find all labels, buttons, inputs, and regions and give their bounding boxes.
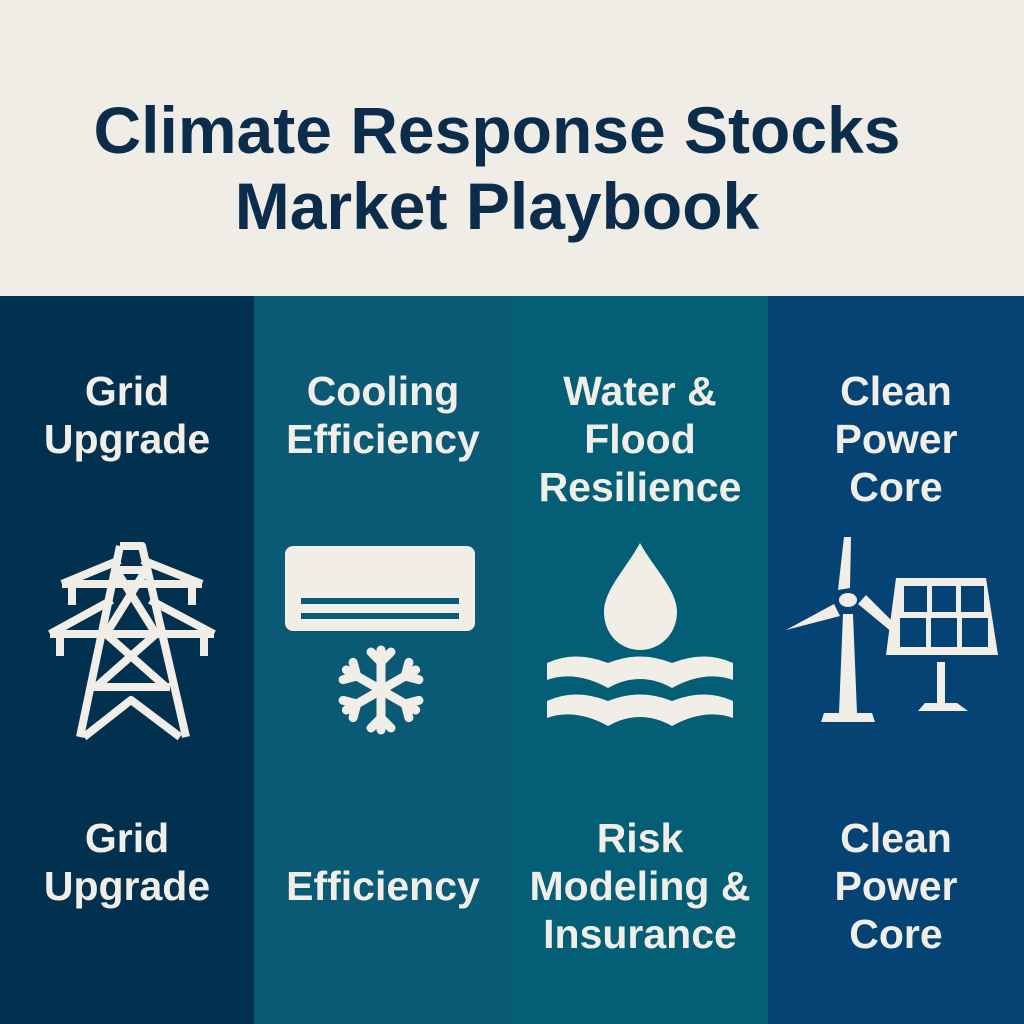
icon: wind turbine: [786, 537, 904, 722]
label: clean power top: Clean: [840, 368, 952, 414]
label: water flood top: Water &: [563, 368, 717, 414]
label: grid upgrade bottom: Grid: [85, 815, 169, 861]
icon: transmission tower: [50, 546, 214, 737]
label: efficiency bottom: Efficiency: [286, 863, 480, 909]
title: Market Playbook: [235, 169, 759, 243]
label: water flood top: Resilience: [539, 464, 741, 510]
label: grid upgrade top: Grid: [85, 368, 169, 414]
label: risk modeling bottom: Modeling &: [530, 863, 750, 909]
label: grid upgrade bottom: [44, 815, 210, 909]
label: clean power bottom: Power: [834, 863, 958, 909]
panel: clean power core: [768, 296, 1024, 1024]
icon: solar panel: [886, 578, 998, 711]
label: clean power top: Core: [849, 464, 943, 510]
title: [94, 93, 900, 243]
icon: air conditioner: [285, 546, 475, 631]
label: risk modeling bottom: Risk: [597, 815, 683, 861]
label: cooling efficiency top: [286, 368, 480, 462]
label: water flood top: Flood: [584, 416, 696, 462]
panel: water flood resilience: [512, 296, 768, 1024]
label: clean power top: [834, 368, 958, 510]
label: clean power bottom: Core: [849, 911, 943, 957]
panel: grid upgrade: [0, 296, 254, 1024]
label: cooling efficiency top: Efficiency: [286, 416, 480, 462]
panel: cooling efficiency: [254, 296, 512, 1024]
label: grid upgrade top: Upgrade: [44, 416, 210, 462]
label: grid upgrade bottom: Upgrade: [44, 863, 210, 909]
header: [0, 0, 1024, 296]
label: cooling efficiency top: Cooling: [307, 368, 459, 414]
icon: snowflake: [341, 650, 421, 730]
label: risk modeling bottom: [530, 815, 750, 957]
label: clean power bottom: [834, 815, 958, 957]
label: clean power top: Power: [834, 416, 958, 462]
label: risk modeling bottom: Insurance: [543, 911, 737, 957]
label: clean power bottom: Clean: [840, 815, 952, 861]
label: water flood top: [539, 368, 741, 510]
icon: water drop and waves: [547, 543, 733, 726]
title: Climate Response Stocks: [94, 93, 900, 167]
label: grid upgrade top: [44, 368, 210, 462]
